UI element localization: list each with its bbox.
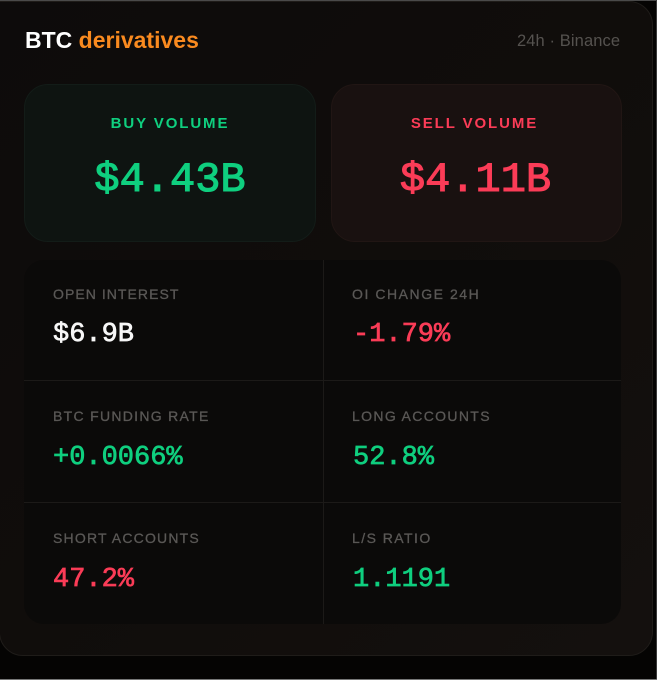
panel: buy volume	[24, 84, 316, 242]
long accounts label: LONG ACCOUNTS	[352, 408, 491, 424]
sell volume label: SELL VOLUME	[411, 115, 538, 132]
short accounts value: 47.2%	[53, 565, 134, 595]
open interest value: $6.9B	[53, 320, 134, 350]
ls ratio value: 1.1191	[353, 565, 450, 595]
short accounts label: SHORT ACCOUNTS	[53, 530, 200, 546]
ls ratio label: L/S RATIO	[352, 530, 432, 546]
oi change label: OI CHANGE 24H	[352, 286, 480, 302]
open interest label: OPEN INTEREST	[53, 286, 179, 302]
long accounts value: 52.8%	[353, 443, 434, 473]
panel: sell volume	[331, 84, 622, 242]
funding rate label: BTC FUNDING RATE	[53, 408, 210, 424]
source note: 24h · Binance	[517, 32, 620, 50]
sell volume value: $4.11B	[400, 156, 551, 204]
panel: metrics grid	[24, 260, 621, 624]
buy volume value: $4.43B	[94, 156, 246, 204]
funding rate value: +0.0066%	[53, 443, 183, 473]
title: BTC derivatives	[25, 27, 199, 53]
oi change value: -1.79%	[353, 320, 450, 350]
buy volume label: BUY VOLUME	[111, 115, 229, 132]
